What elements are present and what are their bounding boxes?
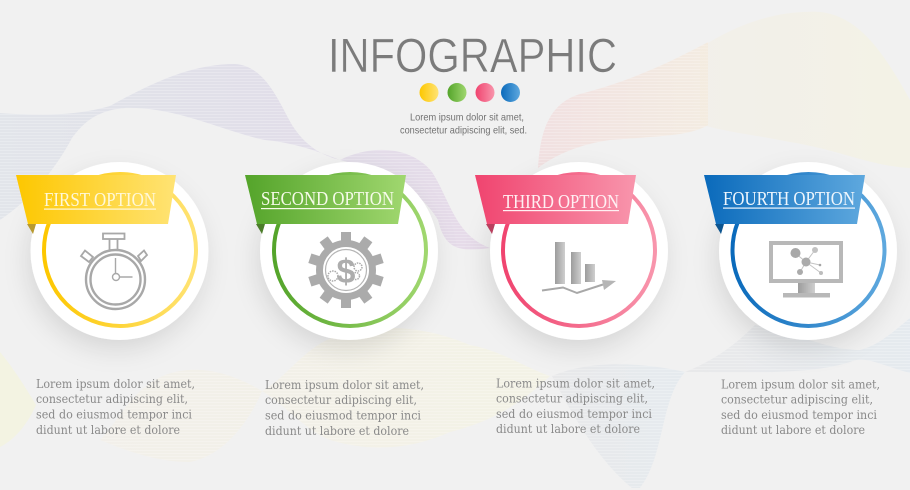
disc <box>260 162 438 340</box>
ribbon: SECOND OPTION <box>261 188 394 210</box>
panel: third option <box>475 162 668 436</box>
subtitle: Lorem ipsum dolor sit amet, <box>410 112 524 124</box>
ring <box>44 174 196 326</box>
body text: Lorem ipsum dolor sit amet, <box>265 377 424 392</box>
ribbon: THIRD OPTION <box>503 191 619 213</box>
body text <box>721 376 880 437</box>
icon: gear with dollar: $ <box>337 253 356 291</box>
body text <box>36 376 195 437</box>
body text: Lorem ipsum dolor sit amet, <box>496 376 655 390</box>
title: INFOGRAPHIC <box>328 30 617 83</box>
body text: sed do eiusmod tempor inci <box>496 406 652 421</box>
body text: didunt ut labore et dolore <box>721 422 865 437</box>
icon: bar chart with arrow <box>542 242 616 293</box>
icon: stopwatch <box>81 234 147 309</box>
disc <box>30 162 208 340</box>
icon: gear with dollar <box>308 232 384 308</box>
ribbon <box>16 175 176 234</box>
panel: second option <box>245 162 438 438</box>
body text: didunt ut labore et dolore <box>36 422 180 437</box>
disc <box>719 162 897 340</box>
body text: sed do eiusmod tempor inci <box>265 408 421 422</box>
panel: fourth option <box>704 162 897 437</box>
body text <box>265 377 424 438</box>
ring <box>274 174 426 326</box>
body text: consectetur adipiscing elit, <box>496 390 648 406</box>
ribbon: FOURTH OPTION <box>723 188 855 210</box>
subtitle: consectetur adipiscing elit, sed. <box>400 124 527 136</box>
body text: sed do eiusmod tempor inci <box>721 407 877 422</box>
ribbon <box>704 175 865 234</box>
ring <box>503 174 655 326</box>
ring <box>732 174 884 326</box>
body text: Lorem ipsum dolor sit amet, <box>36 376 195 391</box>
subtitle <box>400 112 527 136</box>
body text: consectetur adipiscing elit, <box>265 392 417 407</box>
disc <box>490 162 668 340</box>
ribbon <box>475 175 636 234</box>
panel: first option <box>16 162 208 437</box>
icon: monitor with network <box>771 243 841 298</box>
colour dots <box>420 83 520 102</box>
ribbon <box>245 175 406 234</box>
body text: sed do eiusmod tempor inci <box>36 406 192 422</box>
body text <box>496 376 655 436</box>
body text: consectetur adipiscing elit, <box>721 392 873 406</box>
body text: consectetur adipiscing elit, <box>36 391 188 406</box>
ribbon: FIRST OPTION <box>44 189 156 211</box>
body text: didunt ut labore et dolore <box>496 421 640 436</box>
body text: Lorem ipsum dolor sit amet, <box>721 376 880 392</box>
body text: didunt ut labore et dolore <box>265 423 409 438</box>
